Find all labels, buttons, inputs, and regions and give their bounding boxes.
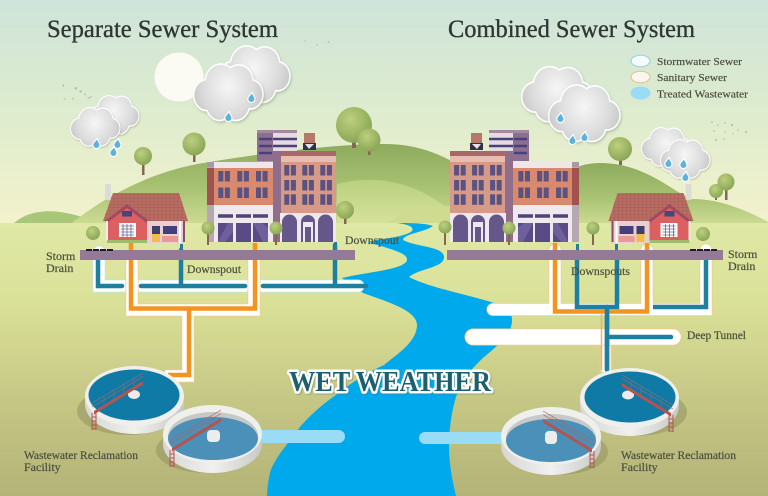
legend: Stormwater Sewer — [657, 56, 742, 68]
label: downspouts right: Downspouts — [571, 264, 630, 278]
label: wastewater reclamation facility left: Wastewater Reclamation — [24, 448, 138, 462]
flocks of birds — [62, 40, 747, 141]
left treatment tanks — [77, 366, 262, 473]
label: wastewater reclamation facility right: Facility — [621, 460, 658, 474]
label: deep tunnel: Deep Tunnel — [687, 328, 747, 342]
house: separate system — [103, 184, 188, 243]
title: separate sewer system: Separate Sewer System — [47, 16, 279, 43]
clouds: separate system — [71, 47, 289, 157]
sun — [154, 52, 204, 102]
label: storm drain left: Storm — [46, 249, 76, 263]
street trees — [202, 220, 600, 245]
buildings: separate system — [207, 130, 336, 242]
label: storm drain left: Drain — [46, 261, 73, 275]
house: combined system — [608, 184, 694, 243]
sky background — [0, 0, 768, 225]
storm drain streets — [80, 242, 723, 260]
label: downspout left pipe: Downspout — [187, 262, 242, 276]
pipes: separate system — [98, 243, 366, 376]
legend — [630, 55, 748, 100]
label: wastewater reclamation facility left: Facility — [24, 460, 61, 474]
ground — [0, 223, 768, 496]
label: wastewater reclamation facility right: Wastewater Reclamation — [621, 448, 736, 462]
headline: wet weather: WET WEATHER — [289, 366, 492, 398]
label: storm drain right: Storm — [728, 247, 758, 261]
treated wastewater outfall: left — [255, 430, 345, 443]
clouds: combined system — [522, 67, 710, 182]
pipes: combined system — [473, 243, 706, 372]
title: combined sewer system: Combined Sewer System — [448, 16, 696, 43]
hills — [13, 144, 768, 226]
right treatment tanks — [501, 368, 687, 475]
treated wastewater outfall: right — [419, 432, 509, 444]
river — [267, 223, 512, 496]
trees and bushes — [86, 107, 734, 241]
label: downspout upper: Downspout — [345, 233, 400, 247]
legend: Treated Wastewater — [657, 88, 748, 100]
legend: Sanitary Sewer — [657, 72, 727, 84]
label: storm drain right: Drain — [728, 259, 755, 273]
buildings: combined system — [450, 130, 579, 242]
